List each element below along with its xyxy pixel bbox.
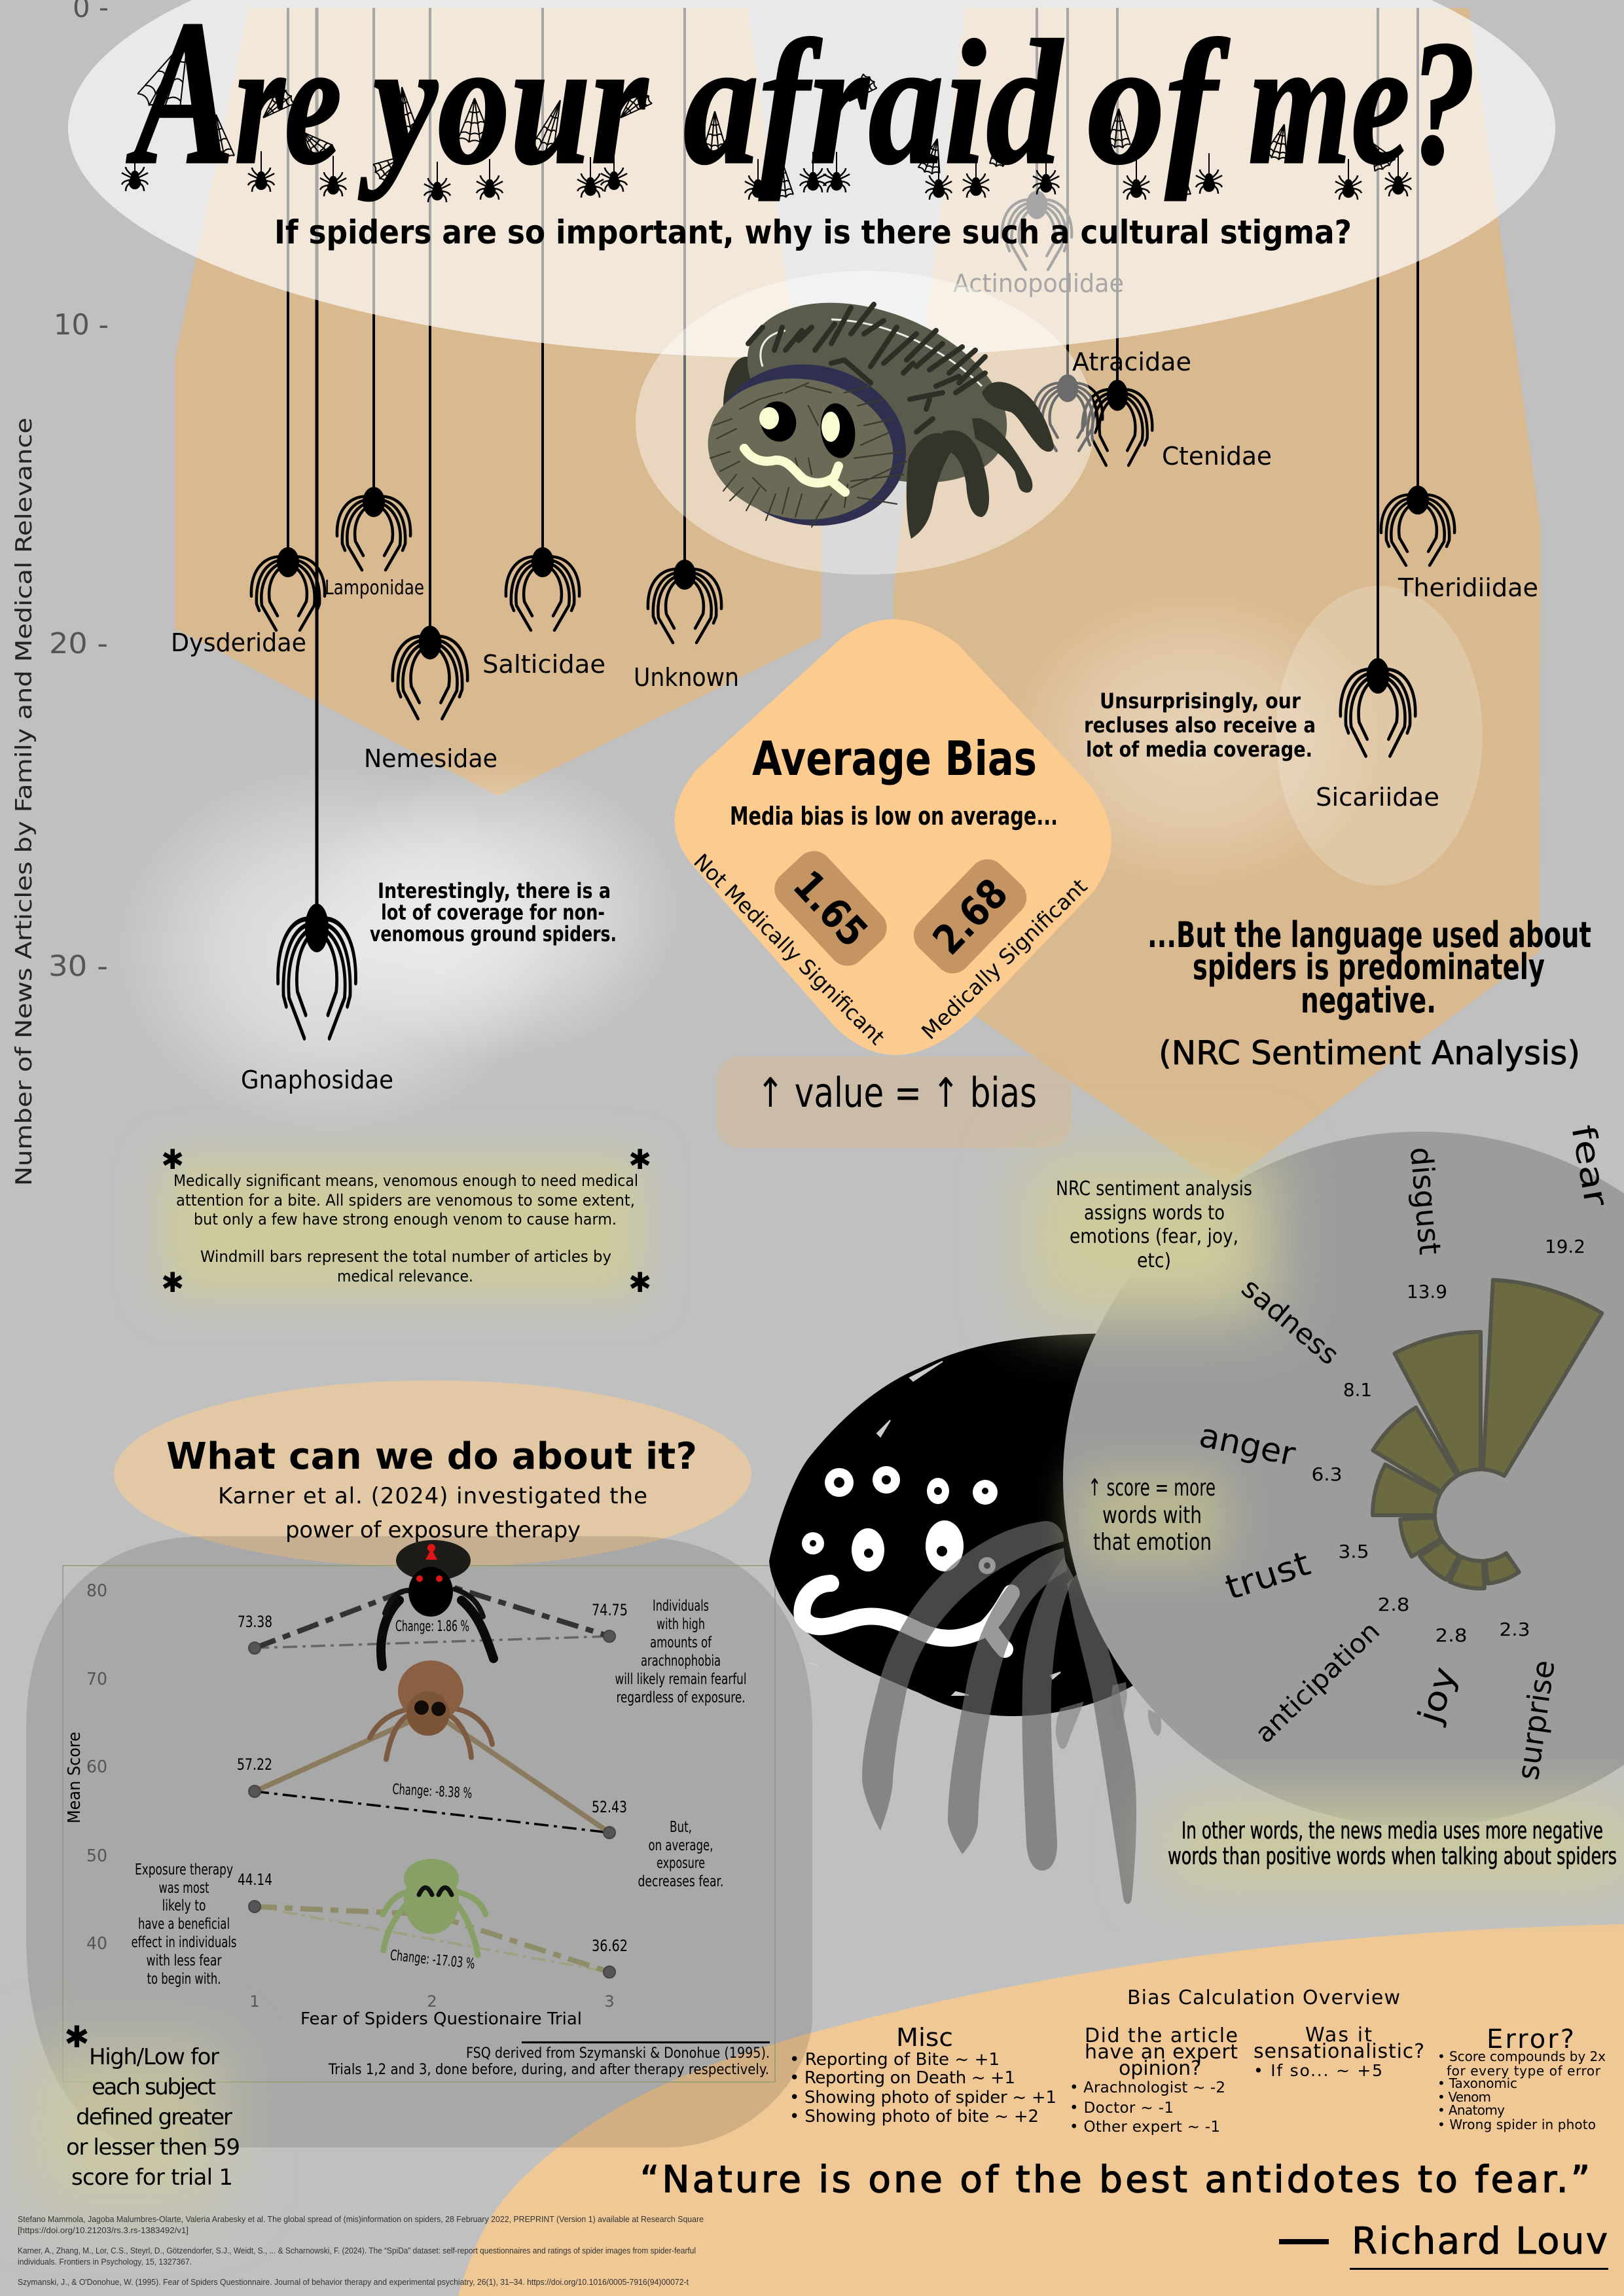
windmill value labels: 2.8 bbox=[1435, 1624, 1468, 1646]
heading: what can we do about it bbox=[166, 1435, 697, 1543]
panel: average bias bbox=[675, 619, 1111, 1055]
y axis labels: 50 bbox=[86, 1846, 107, 1866]
heading: language negative bbox=[1147, 914, 1591, 1021]
note: medically significant: ✱ bbox=[628, 1266, 651, 1299]
value tile: medically significant: 2.68 bbox=[924, 869, 1017, 963]
spider family labels: Dysderidae bbox=[171, 628, 306, 657]
caption: FSQ derived from Szymanski & Donohue (1995). bbox=[466, 2045, 770, 2062]
subheading: NRC sentiment analysis: (NRC Sentiment Analysis) bbox=[1159, 1034, 1580, 1072]
note: high low definition: score for trial 1 bbox=[71, 2164, 233, 2191]
column: misc bbox=[789, 2023, 1056, 2126]
x axis: 3 bbox=[604, 1992, 615, 2011]
quote attribution: Richard Louv bbox=[1352, 2220, 1608, 2263]
central fuzzy spider illustration bbox=[698, 268, 1054, 543]
column: error: • Taxonomic bbox=[1437, 2075, 1517, 2091]
references: [https://doi.org/10.21203/rs.3.rs-1383492/v1] bbox=[18, 2225, 189, 2235]
annotation: arachnophobia bbox=[615, 1598, 746, 1706]
recluse highlight ellipse bbox=[1276, 586, 1483, 886]
note: NRC assigns words: etc) bbox=[1137, 1249, 1171, 1272]
note: high low definition: defined greater bbox=[76, 2104, 232, 2130]
spider family labels bbox=[171, 348, 1538, 1094]
column: expert opinion: • Doctor ~ -1 bbox=[1070, 2100, 1174, 2117]
y axis tick labels bbox=[48, 0, 109, 983]
note: NRC assigns words: emotions (fear, joy, bbox=[1070, 1225, 1238, 1248]
column: error: for every type of error bbox=[1447, 2063, 1601, 2079]
spider: Dysderidae bbox=[251, 8, 325, 630]
glow: recluse callout bbox=[1005, 586, 1384, 893]
y axis labels bbox=[86, 1581, 107, 1954]
column: error: • Venom bbox=[1437, 2089, 1491, 2105]
note: high low definition: High/Low for bbox=[89, 2044, 219, 2070]
caption bbox=[328, 2041, 770, 2078]
olive glow: score note bbox=[1080, 1473, 1224, 1564]
x axis: Fear of Spiders Questionaire Trial bbox=[300, 2009, 582, 2029]
windmill value labels: 19.2 bbox=[1545, 1236, 1585, 1257]
olive glow: NRC note bbox=[1028, 1158, 1270, 1316]
column: error: • Anatomy bbox=[1437, 2102, 1505, 2118]
note: medically significant: medical relevance. bbox=[337, 1267, 473, 1285]
y axis tick labels: 20 - bbox=[49, 627, 108, 660]
y axis title: Number of News Articles by Family and Medical Relevance bbox=[11, 418, 37, 1186]
callout: ground spiders: venomous ground spiders. bbox=[370, 922, 617, 946]
windmill value labels: 13.9 bbox=[1407, 1281, 1447, 1302]
spider flecks bbox=[808, 1361, 1060, 1695]
heading: bias calculation: Bias Calculation Overview bbox=[1127, 1986, 1400, 2009]
subtitle: If spiders are so important, why is there such a cultural stigma? bbox=[274, 213, 1352, 251]
title: me? bbox=[1248, 4, 1476, 201]
title: afraid bbox=[683, 4, 1064, 202]
heading: what can we do about it: Karner et al. (2024) investigated the bbox=[218, 1483, 647, 1509]
windmill emotion labels: joy bbox=[1411, 1662, 1464, 1729]
note: NRC assigns words: assigns words to bbox=[1084, 1202, 1225, 1225]
spider: black widow bbox=[381, 1540, 494, 1666]
note: medically significant: attention for a bite. All spiders are venomous to some extent, bbox=[176, 1191, 635, 1210]
spider family labels: Atracidae bbox=[1072, 348, 1191, 376]
x axis: 1 bbox=[249, 1992, 260, 2011]
note: medically significant: ✱ bbox=[161, 1143, 184, 1175]
spider: Theridiidae bbox=[1381, 8, 1454, 565]
y axis title: Mean Score bbox=[65, 1732, 84, 1823]
spider: Lamponidae bbox=[337, 8, 410, 570]
legend: value equals bias: ↑ value = ↑ bias bbox=[757, 1069, 1037, 1117]
windmill emotion labels: anger bbox=[1196, 1416, 1299, 1473]
data labels: 74.75 bbox=[592, 1601, 628, 1619]
column: misc: • Reporting of Bite ~ +1 bbox=[789, 2050, 1000, 2070]
title: of bbox=[1087, 4, 1231, 202]
spider family labels: Lamponidae bbox=[325, 577, 424, 600]
spider family labels: Ctenidae bbox=[1162, 442, 1272, 471]
note: score more words: that emotion bbox=[1093, 1529, 1212, 1556]
y axis tick labels: 10 - bbox=[54, 308, 109, 342]
callout: ground spiders: lot of coverage for non- bbox=[381, 900, 605, 925]
quote: “Nature is one of the best antidotes to fear.” bbox=[640, 2159, 1590, 2201]
column: misc: Misc bbox=[896, 2023, 953, 2052]
spider: Unknown bbox=[648, 8, 721, 643]
y axis labels: 40 bbox=[86, 1934, 107, 1954]
spider: Salticidae bbox=[506, 8, 579, 630]
change labels bbox=[389, 1619, 476, 1973]
spider legs bbox=[907, 382, 1054, 539]
references bbox=[18, 2214, 704, 2287]
caption: Trials 1,2 and 3, done before, during, and after therapy respectively. bbox=[328, 2062, 769, 2078]
spider eyes bbox=[802, 1466, 998, 1574]
column: expert opinion: Did the article bbox=[1085, 2024, 1238, 2047]
windmill emotion labels: fear bbox=[1564, 1122, 1615, 1210]
edge label: not medically significant: Not Medically Significant bbox=[689, 849, 890, 1050]
title: your bbox=[357, 4, 650, 202]
callout: recluses: Unsurprisingly, our bbox=[1100, 689, 1301, 713]
series: average fear bbox=[255, 1712, 609, 1833]
column: misc: • Showing photo of bite ~ +2 bbox=[789, 2107, 1039, 2126]
title hanging spiders bbox=[122, 151, 1411, 202]
data labels: 36.62 bbox=[592, 1937, 628, 1955]
value tile: not medically significant: 1.65 bbox=[784, 861, 877, 956]
callout: ground spiders bbox=[370, 878, 617, 946]
windmill value labels: 2.8 bbox=[1377, 1594, 1410, 1615]
note: score more words: words with bbox=[1102, 1502, 1202, 1529]
column: expert opinion: opinion? bbox=[1119, 2057, 1201, 2080]
chart: exposure therapy line chart bbox=[63, 1540, 775, 2082]
y axis tick labels: 30 - bbox=[48, 950, 108, 983]
column: sensationalistic: • If so... ~ +5 bbox=[1254, 2061, 1382, 2080]
left tan windmill shape bbox=[175, 8, 821, 796]
annotation: beneficial effect: likely to bbox=[162, 1897, 206, 1914]
y axis labels: 70 bbox=[86, 1670, 107, 1689]
annotation: beneficial effect: effect in individuals bbox=[131, 1934, 237, 1951]
note: score more words: ↑ score = more bbox=[1088, 1475, 1216, 1501]
annotation: decreases fear: exposure bbox=[657, 1855, 705, 1872]
callout: ground spiders: Interestingly, there is a bbox=[378, 878, 611, 903]
spider: green bbox=[383, 1859, 486, 1955]
value tile: medically significant bbox=[906, 852, 1034, 981]
spider: Gnaphosidae bbox=[278, 8, 355, 1038]
edge label: medically significant: Medically Significant bbox=[916, 874, 1092, 1045]
column: sensationalistic: Was it bbox=[1305, 2024, 1372, 2047]
heading: what can we do about it: power of exposure therapy bbox=[285, 1517, 581, 1543]
note: high low definition: each subject bbox=[92, 2074, 216, 2100]
large black spider illustration bbox=[769, 1333, 1161, 1904]
column: expert opinion: • Other expert ~ -1 bbox=[1070, 2119, 1220, 2136]
note: score more words bbox=[1088, 1475, 1216, 1556]
spider family labels: Unknown bbox=[634, 663, 739, 692]
spider: Sicariidae bbox=[1341, 8, 1415, 756]
spider: Ctenidae bbox=[1083, 8, 1152, 465]
quote attribution bbox=[1279, 2220, 1608, 2270]
panel: chart backdrop bbox=[26, 1536, 812, 2147]
column: misc: • Reporting on Death ~ +1 bbox=[789, 2068, 1015, 2088]
y axis labels: 80 bbox=[86, 1581, 107, 1601]
spider: Actinopodidae: Actinopodidae bbox=[953, 269, 1124, 298]
note: medically significant: ✱ bbox=[161, 1266, 184, 1299]
title bbox=[125, 0, 1476, 207]
callout: recluses bbox=[1084, 689, 1316, 762]
spider family labels: Nemesidae bbox=[364, 744, 497, 773]
olive glow: other words note bbox=[1165, 1806, 1624, 1885]
chart: NRC windmill bars bbox=[1373, 1280, 1602, 1588]
column: error bbox=[1437, 2024, 1606, 2132]
column: sensationalistic: sensationalistic? bbox=[1254, 2040, 1424, 2063]
windmill value labels: 3.5 bbox=[1338, 1541, 1369, 1562]
title cobwebs bbox=[135, 28, 1396, 197]
glow: ground spiders callout bbox=[111, 759, 684, 1136]
callout: recluses: lot of media coverage. bbox=[1086, 737, 1312, 762]
note: in other words bbox=[1168, 1818, 1617, 1870]
spider family labels: Theridiidae bbox=[1398, 573, 1538, 602]
note: high low definition: or lesser then 59 bbox=[66, 2134, 240, 2161]
annotation: arachnophobia: Individuals bbox=[653, 1598, 709, 1615]
spider: brown bbox=[370, 1660, 492, 1759]
references: Karner, A., Zhang, M., Lor, C.S., Steyrl, D., Götzendorfer, S.J., Weidt, S., ... & Scharnowski, F. (2024). The “SpiDa” dataset: self-report questionnaires and ratings of spider images from spider-fearful bbox=[18, 2246, 696, 2255]
series: high fear bbox=[255, 1581, 609, 1648]
spider: Nemesidae bbox=[393, 8, 467, 719]
right tan windmill shape bbox=[893, 8, 1540, 1186]
annotation: beneficial effect bbox=[131, 1861, 237, 1988]
column: error: • Wrong spider in photo bbox=[1437, 2117, 1596, 2132]
windmill emotion labels bbox=[1196, 1122, 1615, 1782]
annotation: decreases fear: But, bbox=[670, 1819, 692, 1836]
note: medically significant: Medically significant means, venomous enough to need medical bbox=[173, 1172, 638, 1190]
annotation: decreases fear: decreases fear. bbox=[638, 1873, 724, 1890]
heading: average bias: Average Bias bbox=[752, 731, 1037, 786]
data labels: 73.38 bbox=[238, 1613, 272, 1631]
spider legs bbox=[862, 1521, 1161, 1904]
annotation: decreases fear bbox=[638, 1819, 724, 1890]
annotation: arachnophobia: amounts of bbox=[650, 1634, 712, 1651]
change labels: Change: -17.03 % bbox=[389, 1947, 476, 1973]
column: sensationalistic bbox=[1254, 2024, 1424, 2080]
note: high low definition: ✱ bbox=[64, 2019, 90, 2054]
spider family labels: Sicariidae bbox=[1316, 783, 1439, 812]
column: expert opinion: • Arachnologist ~ -2 bbox=[1070, 2079, 1225, 2096]
olive glow: medical note bbox=[164, 1158, 641, 1296]
spider mouth bbox=[802, 1583, 1011, 1649]
callout: recluses: recluses also receive a bbox=[1084, 713, 1316, 738]
note: NRC assigns words bbox=[1056, 1177, 1252, 1272]
references: Stefano Mammola, Jagoba Malumbres-Olarte, Valeria Arabesky et al. The global spread of (mis)information on spiders, 28 February 2022, PREPRINT (Version 1) available at Research Square bbox=[18, 2214, 704, 2224]
olive glow: high low note bbox=[33, 2049, 223, 2206]
data labels: 52.43 bbox=[592, 1798, 627, 1816]
x axis: 2 bbox=[427, 1992, 437, 2011]
column: misc: • Showing photo of spider ~ +1 bbox=[789, 2088, 1056, 2108]
central spider halo bbox=[636, 271, 1095, 575]
bottom orange blob bbox=[458, 1924, 1624, 2296]
change labels: Change: 1.86 % bbox=[395, 1619, 469, 1635]
spider family labels: Gnaphosidae bbox=[241, 1066, 393, 1094]
references: Szymanski, J., & O'Donohue, W. (1995). Fear of Spiders Questionnaire. Journal of behavior therapy and experimental psychiatry, 26(1), 31–34. https://doi.org/10.1016/0005-7916(94)00072-t bbox=[18, 2277, 689, 2287]
windmill value labels bbox=[1312, 1236, 1585, 1646]
note: high low definition bbox=[64, 2019, 240, 2191]
annotation: decreases fear: on average, bbox=[648, 1837, 713, 1854]
heading: language negative: negative. bbox=[1301, 980, 1436, 1021]
heading ellipse: what can we do bbox=[114, 1380, 751, 1568]
change labels: Change: -8.38 % bbox=[392, 1782, 473, 1802]
data labels bbox=[237, 1601, 628, 1955]
windmill value labels: 8.1 bbox=[1343, 1379, 1372, 1401]
annotation: beneficial effect: to begin with. bbox=[147, 1971, 221, 1988]
x axis bbox=[249, 1992, 615, 2029]
references: individuals. Frontiers in Psychology, 15, 1327367. bbox=[18, 2257, 192, 2267]
title ellipse bbox=[68, 0, 1555, 359]
note: medically significant: ✱ bbox=[628, 1143, 651, 1175]
annotation: arachnophobia: arachnophobia bbox=[641, 1653, 721, 1670]
column: expert opinion: have an expert bbox=[1085, 2041, 1238, 2064]
data labels: 57.22 bbox=[237, 1755, 272, 1774]
panel: sentiment circle bbox=[1063, 1132, 1624, 1827]
annotation: arachnophobia: will likely remain fearful bbox=[615, 1671, 746, 1688]
note: medically significant bbox=[161, 1143, 651, 1299]
spider: Actinopodidae bbox=[953, 8, 1124, 298]
note: NRC assigns words: NRC sentiment analysis bbox=[1056, 1177, 1252, 1200]
note: medically significant: Windmill bars represent the total number of articles by bbox=[200, 1247, 611, 1266]
legend: value equals bias bbox=[716, 1056, 1072, 1148]
annotation: arachnophobia: with high bbox=[657, 1616, 705, 1633]
windmill emotion labels: surprise bbox=[1510, 1658, 1562, 1782]
spider: Atracidae bbox=[1033, 8, 1102, 451]
annotation: beneficial effect: Exposure therapy bbox=[135, 1861, 233, 1878]
data labels: 44.14 bbox=[238, 1871, 272, 1889]
column: expert opinion bbox=[1070, 2024, 1238, 2136]
annotation: beneficial effect: have a beneficial bbox=[138, 1916, 230, 1933]
windmill emotion labels: sadness bbox=[1235, 1272, 1345, 1371]
column: error: Error? bbox=[1487, 2024, 1574, 2054]
windmill emotion labels: anticipation bbox=[1250, 1616, 1386, 1749]
subheading: media bias: Media bias is low on average... bbox=[730, 802, 1058, 831]
annotation: beneficial effect: was most bbox=[158, 1880, 209, 1897]
note: medically significant: but only a few have strong enough venom to cause harm. bbox=[194, 1210, 617, 1229]
spider family labels: Salticidae bbox=[482, 650, 605, 679]
data points bbox=[249, 1630, 615, 1978]
series: low fear bbox=[255, 1907, 609, 1972]
column: error: • Score compounds by 2x bbox=[1437, 2049, 1606, 2064]
annotation: beneficial effect: with less fear bbox=[147, 1952, 222, 1969]
heading: what can we do about it: What can we do about it? bbox=[166, 1435, 697, 1478]
y axis labels: 60 bbox=[86, 1757, 107, 1777]
annotation: arachnophobia: regardless of exposure. bbox=[617, 1689, 745, 1706]
windmill value labels: 2.3 bbox=[1499, 1619, 1530, 1640]
windmill emotion labels: trust bbox=[1221, 1544, 1315, 1608]
panel: bias calculation overview bbox=[789, 1986, 1606, 2136]
value tile: not medically significant bbox=[767, 844, 894, 973]
windmill emotion labels: disgust bbox=[1403, 1145, 1448, 1256]
windmill value labels: 6.3 bbox=[1312, 1463, 1342, 1485]
